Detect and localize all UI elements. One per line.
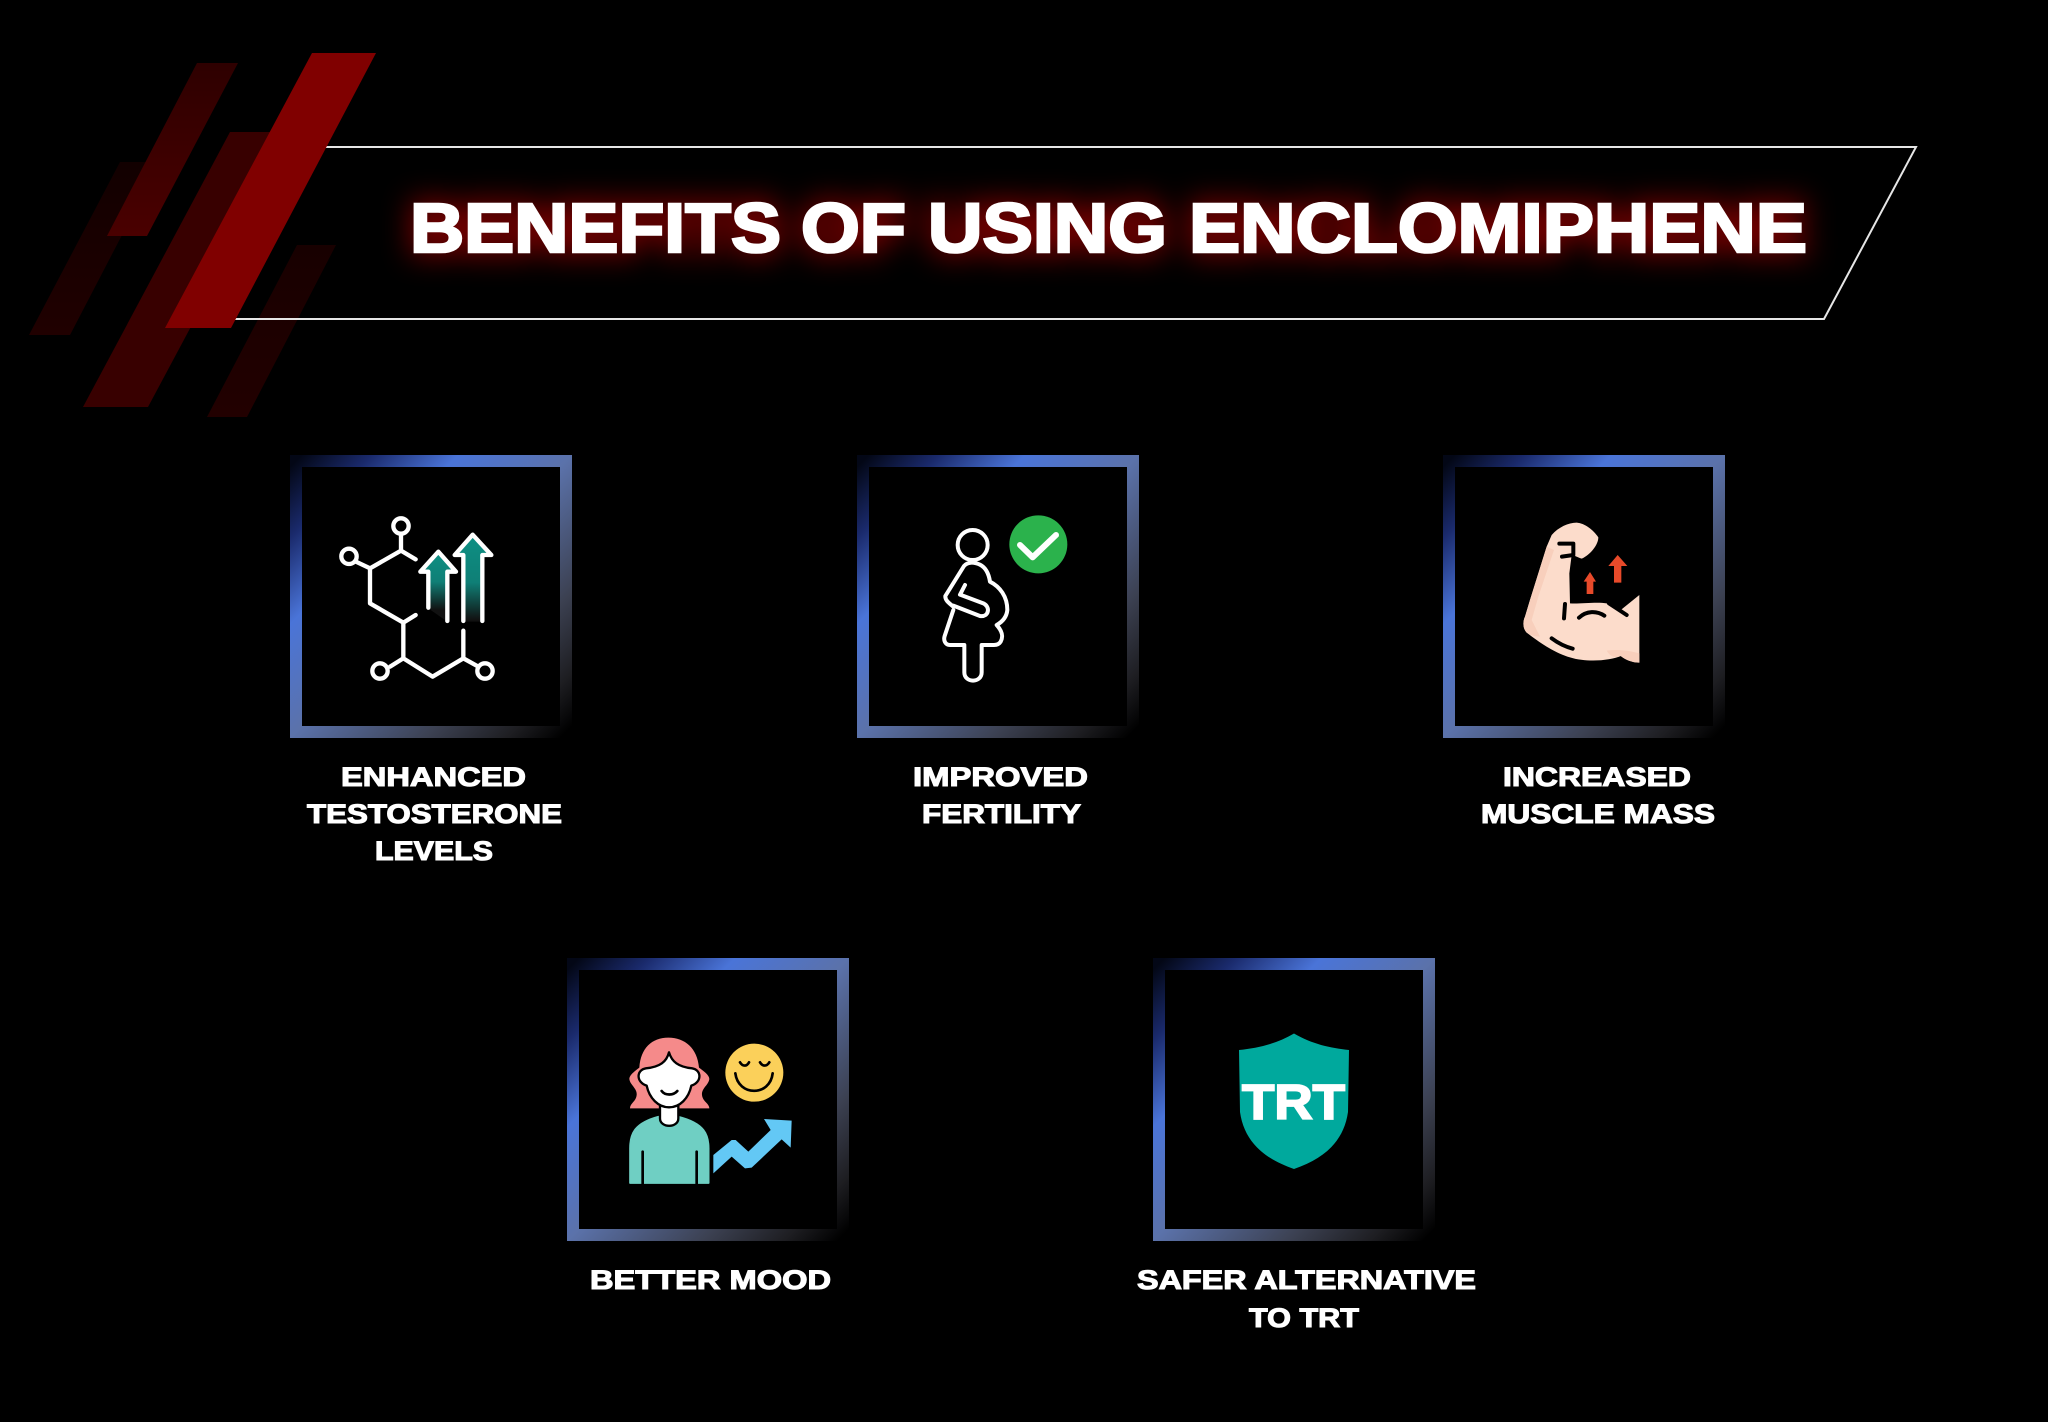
icon: molecule with rising arrows bbox=[341, 518, 493, 679]
label bbox=[913, 762, 1088, 829]
panel: improved fertility bbox=[863, 461, 1133, 829]
label bbox=[1137, 1265, 1476, 1333]
panel: enhanced testosterone levels bbox=[296, 461, 566, 866]
label: INCREASED bbox=[1503, 762, 1691, 792]
label: LEVELS bbox=[375, 836, 493, 866]
label: TESTOSTERONE bbox=[307, 799, 562, 829]
title: USING bbox=[928, 189, 1167, 267]
card frame bbox=[1449, 461, 1719, 732]
icon: TRT shield: TRT bbox=[1242, 1076, 1345, 1130]
label: TO TRT bbox=[1249, 1303, 1360, 1333]
title bbox=[410, 189, 1807, 267]
label: MUSCLE MASS bbox=[1481, 799, 1715, 829]
card frame bbox=[296, 461, 566, 732]
icon: smiling woman with emoji and rising arrow bbox=[629, 1038, 792, 1184]
card frame bbox=[573, 964, 843, 1235]
card frame bbox=[1159, 964, 1429, 1235]
label: BETTER MOOD bbox=[590, 1265, 831, 1295]
panel: increased muscle mass bbox=[1449, 461, 1719, 829]
title: BENEFITS bbox=[410, 189, 781, 267]
icon: pregnant figure with check bbox=[944, 515, 1067, 681]
panel: better mood bbox=[573, 964, 843, 1295]
title banner outline bbox=[232, 147, 1916, 319]
label: ENHANCED bbox=[341, 762, 526, 792]
icon: flexed arm with red arrows bbox=[1523, 523, 1639, 663]
label bbox=[307, 762, 562, 866]
panel: safer alternative to TRT bbox=[1137, 964, 1476, 1333]
decorative red slanted bars bbox=[29, 63, 336, 417]
main red bar bbox=[165, 53, 376, 328]
label: FERTILITY bbox=[922, 799, 1081, 829]
title: ENCLOMIPHENE bbox=[1189, 189, 1807, 267]
title: OF bbox=[801, 189, 906, 267]
card frame bbox=[863, 461, 1133, 732]
label bbox=[1481, 762, 1715, 829]
icon: TRT shield bbox=[1239, 1034, 1349, 1169]
label: IMPROVED bbox=[913, 762, 1088, 792]
label: SAFER ALTERNATIVE bbox=[1137, 1265, 1476, 1295]
